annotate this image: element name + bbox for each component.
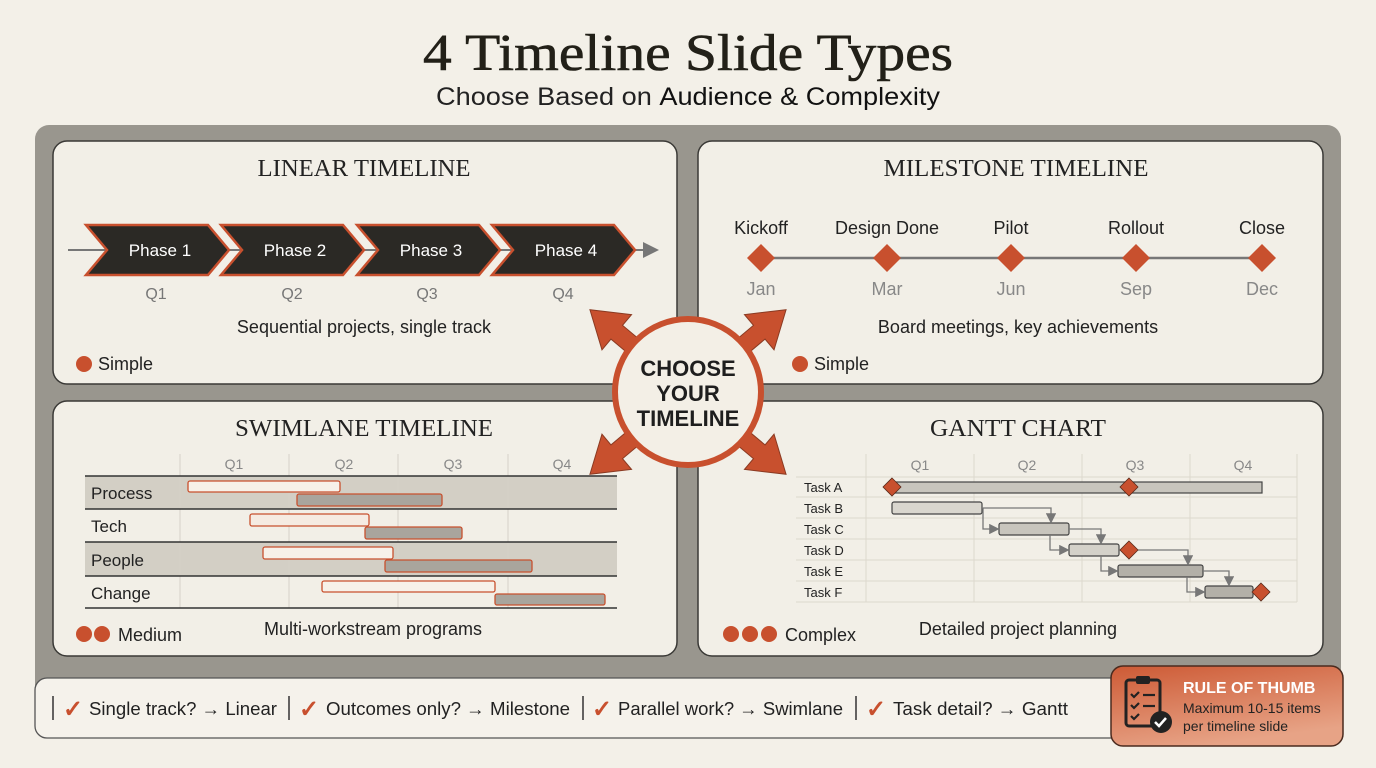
- bottom decision bar: Single track? → Linear: [89, 699, 277, 719]
- panel: linear timeline: Phase 3: [400, 241, 462, 260]
- panel: linear timeline: Phase 4: [535, 241, 597, 260]
- bottom decision bar: ✓: [866, 696, 886, 723]
- panel: gantt chart: Q4: [1234, 457, 1253, 473]
- panel: gantt chart: Q2: [1018, 457, 1037, 473]
- panel: milestone timeline: Jun: [996, 279, 1026, 299]
- panel: linear timeline: Phase 1: [129, 241, 191, 260]
- panel: milestone timeline: Kickoff: [734, 218, 789, 238]
- panel: milestone timeline: Sep: [1120, 279, 1152, 299]
- panel: milestone timeline: [698, 141, 1323, 384]
- panel: swimlane timeline: Q1: [225, 456, 244, 472]
- complexity: complex: Complex: [785, 625, 856, 645]
- title: 4 Timeline Slide Types: [423, 25, 953, 82]
- description: milestone: Board meetings, key achievements: [878, 317, 1158, 337]
- panel: swimlane timeline: Q2: [335, 456, 354, 472]
- panel: linear timeline: Q4: [552, 286, 574, 303]
- icon: clipboard: [1126, 676, 1172, 733]
- heading: linear: LINEAR TIMELINE: [258, 156, 470, 182]
- complexity: medium: Medium: [118, 625, 182, 645]
- panel: milestone timeline: Dec: [1246, 279, 1278, 299]
- panel: linear timeline: Phase 2: [264, 241, 326, 260]
- panel: milestone timeline: Close: [1239, 218, 1285, 238]
- callout: rule of thumb: per timeline slide: [1183, 718, 1288, 734]
- bottom decision bar: ✓: [592, 696, 612, 723]
- heading: gantt: GANTT CHART: [930, 416, 1106, 442]
- callout: rule of thumb: RULE OF THUMB: [1183, 680, 1315, 697]
- panel: gantt chart: Task B: [804, 501, 843, 516]
- panel: milestone timeline: Pilot: [993, 218, 1029, 238]
- panel: gantt chart: Task F: [804, 585, 842, 600]
- panel: milestone timeline: Rollout: [1108, 218, 1164, 238]
- description: gantt: Detailed project planning: [919, 619, 1117, 639]
- panel: gantt chart: Q1: [911, 457, 930, 473]
- central hub: choose your timeline: [575, 292, 801, 492]
- bottom decision bar: Task detail? → Gantt: [893, 699, 1068, 719]
- chevrons: [86, 225, 635, 275]
- panel: swimlane timeline: Change: [91, 584, 151, 603]
- subtitle: Choose Based on Audience & Complexity: [436, 83, 941, 111]
- bottom decision bar: ✓: [299, 696, 319, 723]
- heading: swimlane: SWIMLANE TIMELINE: [235, 416, 493, 442]
- panel: swimlane timeline: Q4: [553, 456, 572, 472]
- panel: milestone timeline: Mar: [872, 279, 903, 299]
- panel: swimlane timeline: Process: [91, 484, 152, 503]
- linear arrow line: [68, 249, 655, 251]
- complexity: medium: [76, 625, 182, 645]
- panel: gantt chart: Q3: [1126, 457, 1145, 473]
- panel: gantt chart: Task A: [804, 480, 843, 495]
- description: swimlane: Multi-workstream programs: [264, 619, 482, 639]
- gray frame: [35, 125, 1341, 705]
- central hub: choose your timeline: YOUR: [656, 381, 720, 406]
- panel: swimlane timeline: Q3: [444, 456, 463, 472]
- bottom decision bar: Parallel work? → Swimlane: [618, 699, 843, 719]
- complexity: complex: [723, 625, 856, 645]
- panel: milestone timeline: Design Done: [835, 218, 939, 238]
- panel: linear timeline: Q3: [416, 286, 438, 303]
- panel: linear timeline: [53, 141, 677, 384]
- callout: rule of thumb: [1111, 666, 1343, 746]
- bottom decision bar: ✓: [63, 696, 83, 723]
- panel: swimlane timeline: Tech: [91, 517, 127, 536]
- central hub: choose your timeline: CHOOSE: [640, 356, 736, 381]
- panel: gantt chart: Task C: [804, 522, 844, 537]
- panel: swimlane timeline: [53, 401, 677, 656]
- heading: milestone: MILESTONE TIMELINE: [884, 156, 1148, 182]
- complexity: simple: Simple: [814, 354, 869, 374]
- panel: gantt chart: Task E: [804, 564, 843, 579]
- complexity: simple: Simple: [98, 354, 153, 374]
- bottom decision bar: Outcomes only? → Milestone: [326, 699, 570, 719]
- panel: linear timeline: Q2: [281, 286, 303, 303]
- arrows: [575, 292, 801, 492]
- panel: milestone timeline: Jan: [746, 279, 776, 299]
- bottom decision bar: [35, 678, 1125, 738]
- panel: gantt chart: Task D: [804, 543, 844, 558]
- callout: rule of thumb: Maximum 10-15 items: [1183, 700, 1321, 716]
- description: linear: Sequential projects, single track: [237, 317, 492, 337]
- panel: linear timeline: Q1: [145, 286, 167, 303]
- central hub: choose your timeline: TIMELINE: [637, 406, 739, 431]
- panel: gantt chart: [698, 401, 1323, 656]
- panel: swimlane timeline: People: [91, 551, 144, 570]
